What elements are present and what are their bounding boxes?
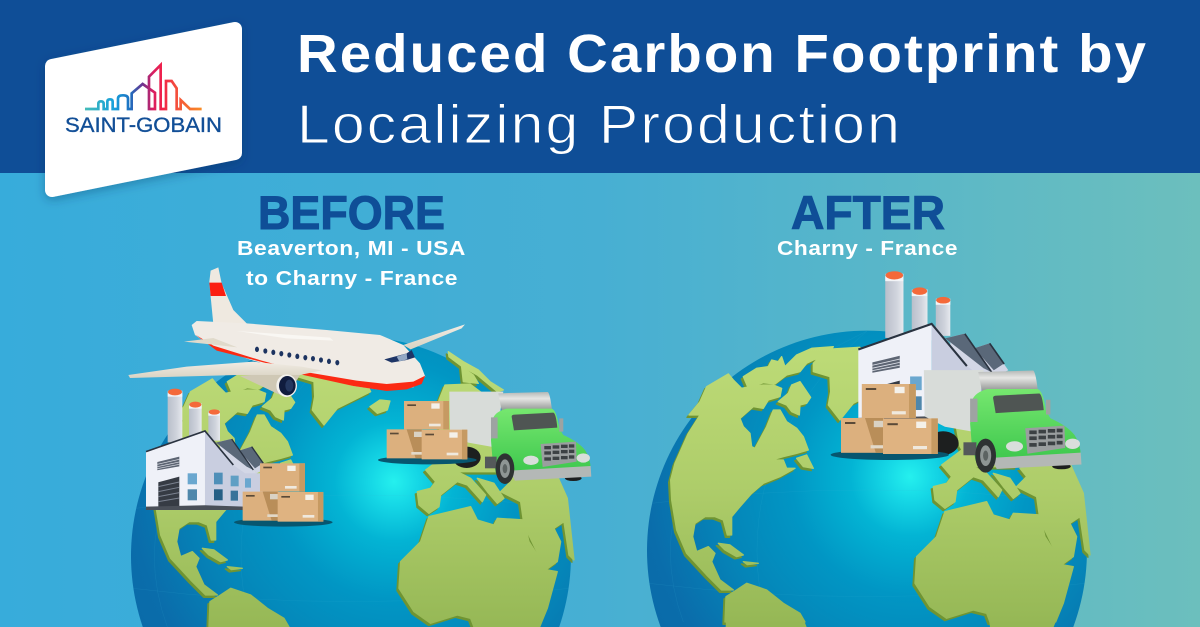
logo wordmark: SAINT-GOBAIN (65, 114, 222, 137)
icon: boxes at factory (234, 463, 333, 527)
globe: before (131, 336, 574, 627)
panel: before heading (237, 186, 466, 290)
location: Charny - France (777, 238, 958, 260)
icon: airplane (128, 267, 465, 397)
title line 1: Reduced Carbon Footprint by (297, 24, 1148, 84)
logo skyline mark (85, 65, 202, 109)
icon: delivery truck (924, 370, 1081, 473)
title line 2: Localizing Production (297, 93, 902, 155)
panel: after heading (777, 186, 958, 260)
title (297, 24, 1148, 155)
heading: BEFORE: BEFORE (258, 186, 445, 239)
heading: AFTER: AFTER (791, 186, 945, 239)
icon: boxes at truck (378, 401, 477, 464)
route line 2: to Charny - France (246, 268, 458, 290)
icon: delivery truck in France (449, 392, 591, 484)
header band (0, 0, 1200, 173)
globe: after (647, 331, 1090, 627)
background (0, 173, 1200, 627)
icon: local factory (858, 271, 1008, 422)
route line 1: Beaverton, MI - USA (237, 238, 466, 260)
logo card: Saint-Gobain (52, 29, 235, 190)
icon: boxes local (831, 384, 949, 460)
icon: factory in USA (146, 389, 267, 510)
